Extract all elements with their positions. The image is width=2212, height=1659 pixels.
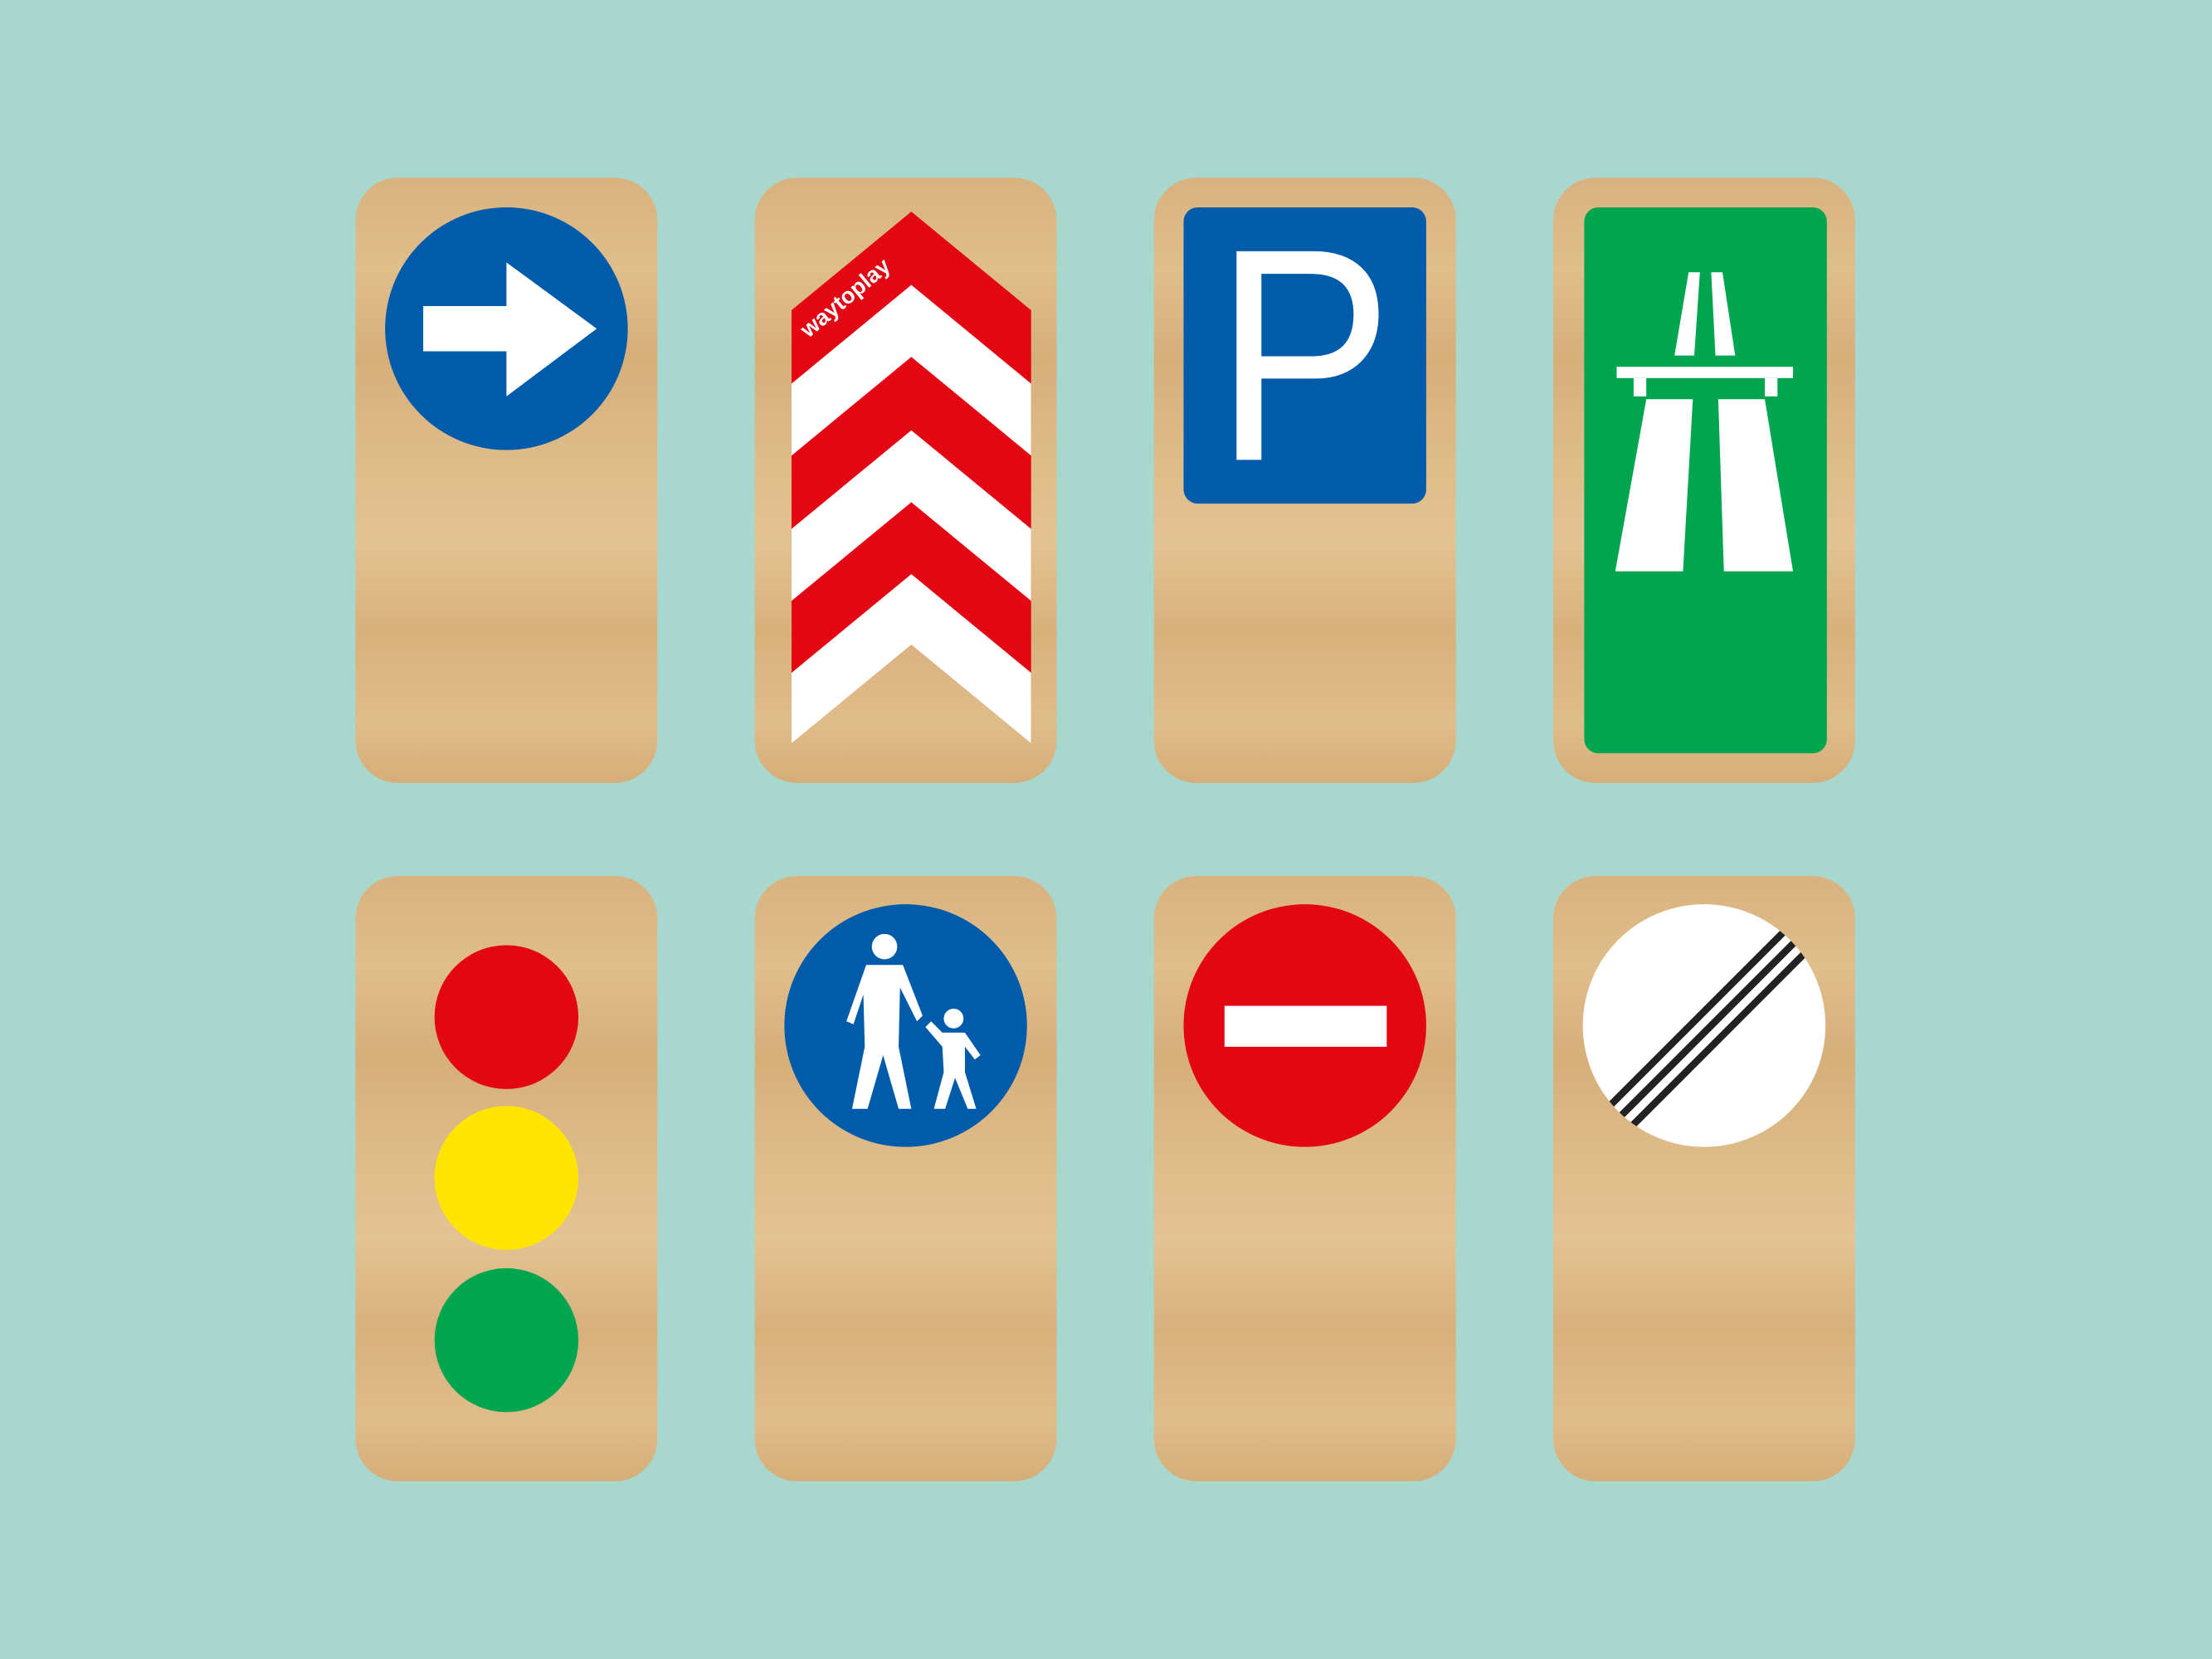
tile: end of motorway	[1553, 876, 1855, 1481]
tile: parking	[1154, 178, 1456, 783]
icon: red white chevron	[792, 212, 1031, 747]
tile: chevron	[755, 178, 1056, 783]
icon: parking sign: P	[1215, 185, 1392, 524]
tile: keep right arrow	[355, 178, 657, 783]
icon: pedestrian sign	[784, 904, 1027, 1147]
icon: blue circle with arrow	[385, 207, 628, 450]
tile: pedestrians	[755, 876, 1056, 1481]
icon: no entry sign	[1184, 904, 1426, 1147]
infographic: road sign tiles	[355, 178, 1855, 1481]
tile: motorway	[1553, 178, 1855, 783]
icon: motorway sign	[1584, 207, 1827, 753]
icon: traffic lights	[435, 945, 578, 1412]
icon: end of restrictions	[1583, 904, 1825, 1147]
brand text: waytoplay	[794, 253, 895, 343]
tile: traffic lights	[355, 876, 657, 1481]
tile: no entry	[1154, 876, 1456, 1481]
